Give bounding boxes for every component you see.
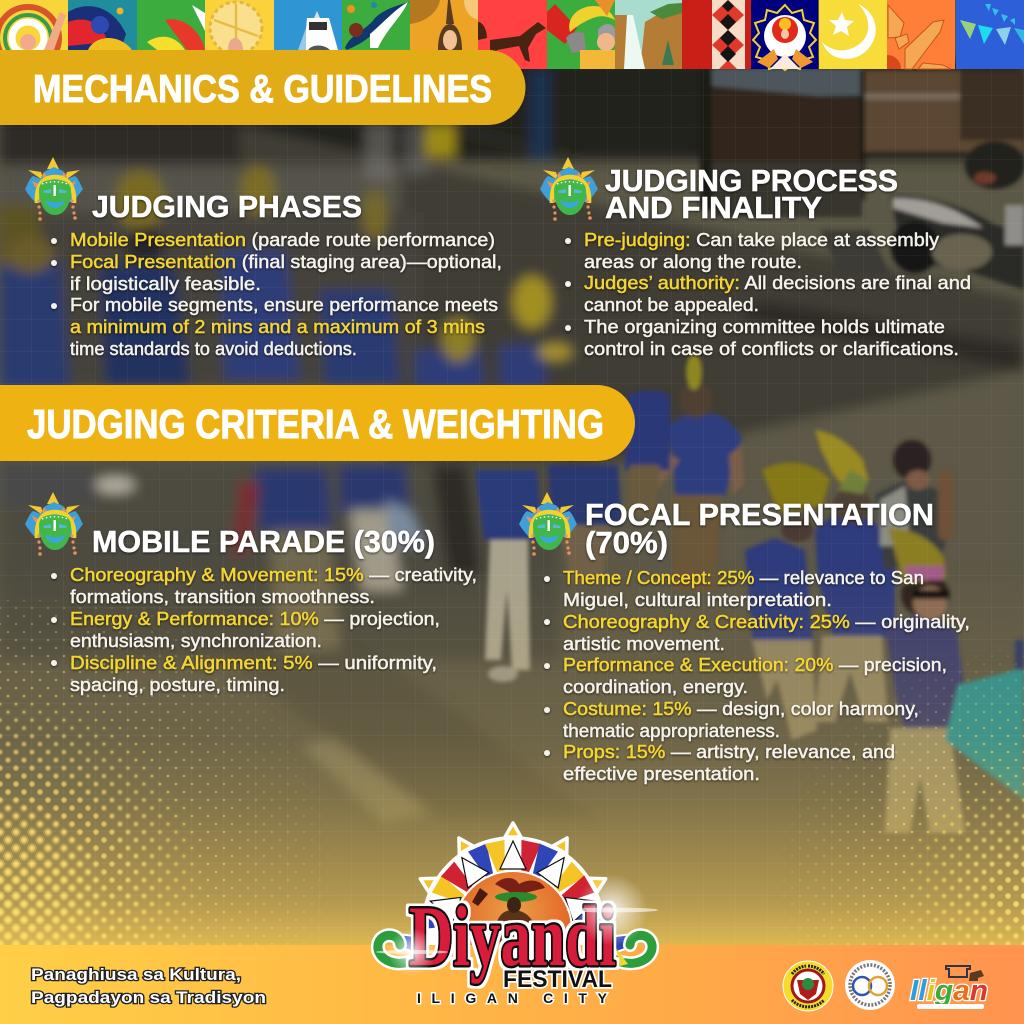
icon: festival mask	[25, 157, 83, 221]
tagline: Panaghiusa sa Kultura,	[31, 965, 241, 984]
tile: green swirl	[342, 0, 410, 69]
crowd	[0, 70, 572, 650]
heading: judging process and finality: AND FINALITY	[605, 190, 822, 225]
heading: focal presentation: (70%)	[585, 525, 668, 560]
seal: city of iligan	[783, 961, 833, 1011]
person 6	[745, 538, 813, 645]
seal: city information office	[845, 960, 895, 1010]
tagline: Pagpadayon sa Tradisyon	[31, 988, 266, 1007]
bullet list: process: control in case of conflicts or clarifications.	[584, 338, 959, 359]
icon: festival mask	[25, 492, 83, 556]
banner	[945, 668, 1024, 800]
bullet list: focal presentation criteria: effective presentation.	[563, 763, 760, 784]
bullet list: phases: Focal Presentation (final staging area)—optional,	[70, 251, 502, 272]
heading: focal presentation	[585, 497, 934, 560]
tile: orange fans	[410, 0, 478, 69]
bullet list: phases: if logistically feasible.	[70, 273, 261, 294]
bullet list: focal presentation criteria: Costume: 15% — design, color harmony,	[563, 698, 919, 719]
bullet list: mobile parade criteria	[51, 564, 477, 695]
bullet list: phases: Mobile Presentation (parade route performance)	[70, 229, 495, 250]
logo side swirls	[378, 933, 652, 966]
logo text: iligan city: ILIGAN CITY	[417, 990, 608, 1006]
logo: Diyandi Festival	[376, 823, 658, 1020]
person 4	[475, 470, 542, 540]
tile: blue monument	[274, 0, 342, 69]
bullet list: process: Judges’ authority: All decisions are final and	[584, 272, 971, 293]
bullet list: focal presentation criteria: Theme / Concept: 25% — relevance to San	[563, 567, 924, 588]
bullet list: process	[565, 229, 971, 359]
person 5	[815, 515, 895, 639]
halftone dots left	[0, 600, 321, 945]
bullet list: process: cannot be appealed.	[584, 294, 759, 315]
top cultural tile strip	[0, 0, 1024, 70]
bullet list: focal presentation criteria: Props: 15% — artistry, relevance, and	[563, 741, 895, 762]
icon: festival mask	[519, 492, 577, 556]
bullet list: phases: a minimum of 2 mins and a maximum of 3 mins	[70, 316, 485, 337]
tile: red with horse	[478, 0, 547, 69]
banner: judging criteria and weighting: JUDGING CRITERIA & WEIGHTING	[27, 401, 604, 447]
bullet list: process: The organizing committee holds ultimate	[584, 316, 945, 337]
icon: festival mask	[540, 157, 598, 221]
bullet list: focal presentation criteria: Choreography & Creativity: 25% — originality,	[563, 611, 970, 632]
person 1	[668, 414, 742, 496]
tile: orange philippine sun	[887, 0, 955, 69]
halftone dots right	[783, 655, 1024, 945]
logo: iligan tourism: Iligan	[910, 975, 988, 1007]
tile: teal okir swirl	[68, 0, 137, 69]
bullet list: mobile parade criteria: enthusiasm, synchronization.	[70, 630, 322, 651]
tile: red with diamonds	[682, 0, 751, 69]
tile: dancer headdress	[0, 0, 68, 69]
logo text: festival: FESTIVAL	[503, 966, 612, 993]
bullet list: phases: time standards to avoid deductions.	[70, 338, 357, 359]
banner: judging criteria and weighting	[0, 385, 635, 461]
bullet list: focal presentation criteria	[544, 567, 970, 784]
bullet list: mobile parade criteria: Energy & Performance: 10% — projection,	[70, 608, 440, 629]
bullet list: phases	[51, 229, 502, 359]
bullet list: mobile parade criteria: formations, transition smoothness.	[70, 586, 375, 607]
person 3	[548, 465, 622, 525]
logo sun burst	[418, 821, 608, 945]
bullet list: focal presentation criteria: artistic movement.	[563, 633, 725, 654]
bullet list: focal presentation criteria: thematic appropriateness.	[563, 720, 780, 741]
person 7 man with radio	[875, 480, 949, 570]
bullet list: focal presentation criteria: Performance & Execution: 20% — precision,	[563, 654, 947, 675]
tile: yellow crescent and star	[819, 0, 887, 69]
logo wordmark: Diyandi: Diyandi	[409, 888, 616, 984]
bullet list: phases: For mobile segments, ensure performance meets	[70, 294, 498, 315]
heading: judging process and finality	[605, 163, 898, 225]
heading: focal presentation: FOCAL PRESENTATION	[585, 497, 934, 532]
panel: focal presentation	[519, 492, 970, 784]
tile: green with feathers	[137, 0, 205, 69]
banner: mechanics and guidelines	[0, 50, 526, 125]
bottom golden fade overlay	[0, 560, 1024, 960]
bullet list: mobile parade criteria: spacing, posture, timing.	[70, 674, 285, 695]
person 8 woman in front	[885, 613, 965, 731]
banner: mechanics and guidelines: MECHANICS & GUIDELINES	[33, 68, 492, 111]
bullet list: focal presentation criteria: coordination, energy.	[563, 676, 748, 697]
bullet list: process: Pre-judging: Can take place at assembly	[584, 229, 940, 250]
bullet list: mobile parade criteria: Choreography & Movement: 15% — creativity,	[70, 564, 477, 585]
panel: judging phases	[25, 157, 502, 359]
bullet list: focal presentation criteria: Miguel, cultural interpretation.	[563, 589, 832, 610]
heading: mobile parade: MOBILE PARADE (30%)	[92, 524, 435, 559]
bullet list: process: areas or along the route.	[584, 251, 802, 272]
footer band	[0, 945, 1024, 1024]
heading: judging process and finality: JUDGING PROCESS	[605, 163, 898, 198]
panel: mobile parade	[25, 492, 477, 695]
tile: waterfall landscape	[615, 0, 682, 69]
lens flares	[376, 874, 658, 976]
heading: judging phases: JUDGING PHASES	[92, 189, 362, 224]
person 2	[625, 390, 670, 470]
panel: judging process and finality	[540, 157, 971, 359]
tile: yellow wheel	[205, 0, 274, 69]
building and bikes	[475, 68, 1024, 833]
bullet list: mobile parade criteria: Discipline & Alignment: 5% — uniformity,	[70, 652, 437, 673]
tagline	[31, 965, 266, 1007]
tile: navy santo nino burst	[751, 0, 818, 70]
tile: green with flag and warrior	[547, 0, 615, 69]
tile: blue bunting	[956, 0, 1024, 69]
